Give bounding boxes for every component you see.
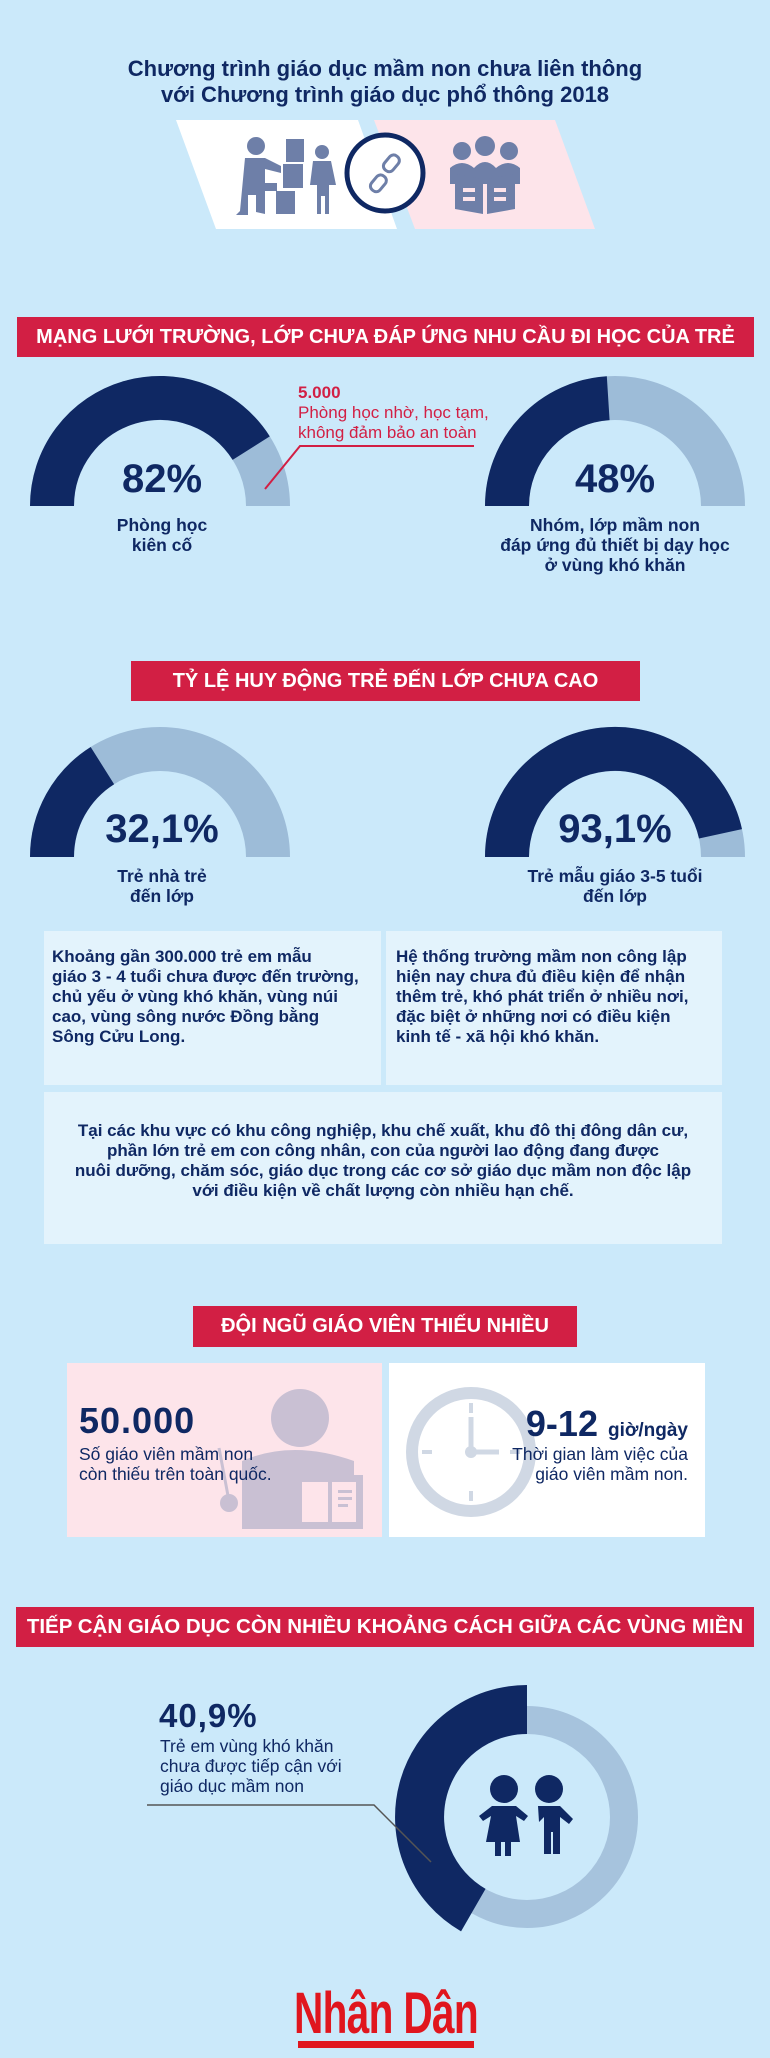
callout: 5.000: 5.000 [298,383,341,402]
text box: public system: kinh tế - xã hội khó khăn. [396,1027,599,1046]
title: với Chương trình giáo dục phổ thông 2018 [161,82,609,107]
label: classrooms [117,515,207,555]
text box: industrial zones: phần lớn trẻ em con công nhân, con của người lao động đang được [107,1141,659,1160]
label: kindergarten: đến lớp [583,886,647,906]
panel: general education (pink) [374,120,595,229]
text box: public system: thêm trẻ, khó phát triển ở nhiều nơi, [396,987,688,1006]
callout: 5.000: Phòng học nhờ, học tạm, [298,403,489,422]
label: groups: đáp ứng đủ thiết bị dạy học [500,535,730,555]
text: teacher shortage: còn thiếu trên toàn quốc. [79,1464,272,1484]
card: teacher shortage [67,1363,382,1537]
label: classrooms: kiên cố [132,535,192,555]
text box: 300,000 children [44,931,381,1085]
text: teacher shortage: Số giáo viên mầm non [79,1444,253,1464]
gauges: 32.1% and 93.1% [30,726,745,857]
stat: 50.000: 50.000 [79,1400,195,1441]
label: nursery: đến lớp [130,886,194,906]
text: working time: Thời gian làm việc của [512,1444,688,1464]
text box: 300,000 children: Khoảng gần 300.000 trẻ em mẫu [52,947,312,966]
gauges: 82% and 48% [30,376,745,506]
text box: 300,000 children: cao, vùng sông nước Đồng bằng [52,1007,319,1026]
label: groups: ở vùng khó khăn [545,555,685,575]
callout: 5.000 [298,383,489,442]
banner: access gap: TIẾP CẬN GIÁO DỤC CÒN NHIỀU KHOẢNG CÁCH GIỮA CÁC VÙNG MIỀN [27,1615,743,1638]
text: working time: giáo viên mầm non. [535,1464,688,1484]
label: groups [500,515,730,575]
label: kindergarten: Trẻ mẫu giáo 3-5 tuổi [527,866,703,886]
label: classrooms: Phòng học [117,515,207,535]
banner: network: MẠNG LƯỚI TRƯỜNG, LỚP CHƯA ĐÁP ỨNG NHU CẦU ĐI HỌC CỦA TRẺ [36,326,735,348]
text box: public system: hiện nay chưa đủ điều kiện để nhận [396,967,685,986]
stat: 93,1%: 93,1% [558,807,672,851]
icon: clock [406,1387,536,1517]
text: access: giáo dục mầm non [160,1776,304,1796]
text box: 300,000 children: chủ yếu ở vùng khó khăn, vùng núi [52,987,338,1006]
donut chart with children icon [147,1685,638,1932]
text box: 300,000 children: Sông Cửu Long. [52,1027,185,1046]
text box: public system: Hệ thống trường mầm non công lập [396,947,687,966]
banner: mobilization: TỶ LỆ HUY ĐỘNG TRẺ ĐẾN LỚP CHƯA CAO [173,670,598,692]
stat: 82%: 82% [122,457,202,501]
banner: mobilization [131,661,640,701]
text: teacher shortage [79,1444,272,1484]
label: kindergarten [527,866,703,906]
title: Chương trình giáo dục mầm non chưa liên thông [128,56,642,81]
stat: 32,1%: 32,1% [105,807,219,851]
stat: 40,9%: 40,9% [159,1697,258,1734]
panel: preschool (white) [176,120,397,229]
banner: teachers [193,1306,577,1347]
text box: industrial zones: nuôi dưỡng, chăm sóc, giáo dục trong các cơ sở giáo dục mầm non độc lập [75,1161,691,1180]
callout: 5.000: không đảm bảo an toàn [298,423,477,442]
pointer line [147,1805,431,1862]
text box: industrial zones: Tại các khu vực có khu công nghiệp, khu chế xuất, khu đô thị đông dân cư, [78,1121,688,1140]
card: working hours [389,1363,705,1537]
text box: public system [386,931,722,1085]
label: nursery [117,866,207,906]
icon: broken chain [347,135,423,211]
text: working time [512,1444,688,1484]
title [128,56,642,107]
stat: 48%: 48% [575,457,655,501]
text: access: Trẻ em vùng khó khăn [160,1736,333,1756]
text: access: chưa được tiếp cận với [160,1756,342,1776]
callout line [265,446,474,489]
label: nursery: Trẻ nhà trẻ [117,866,207,886]
text box: public system: đặc biệt ở những nơi có điều kiện [396,1007,671,1026]
stat: 9-12 hours: 9-12 giờ/ngày [526,1403,688,1444]
banner: access gap [16,1607,754,1647]
text box: industrial zones [44,1092,722,1244]
logo: Nhân Dân: Nhân Dân [294,1981,478,2046]
label: groups: Nhóm, lớp mầm non [530,515,700,535]
text box: 300,000 children: giáo 3 - 4 tuổi chưa được đến trường, [52,967,359,986]
banner: teachers: ĐỘI NGŨ GIÁO VIÊN THIẾU NHIỀU [221,1315,549,1337]
icon: teacher [218,1389,363,1529]
banner: network [17,317,754,357]
text box: industrial zones: với điều kiện về chất lượng còn nhiều hạn chế. [192,1181,574,1200]
header illustration [176,120,595,229]
text: access [160,1736,342,1796]
icon: children [479,1775,573,1856]
